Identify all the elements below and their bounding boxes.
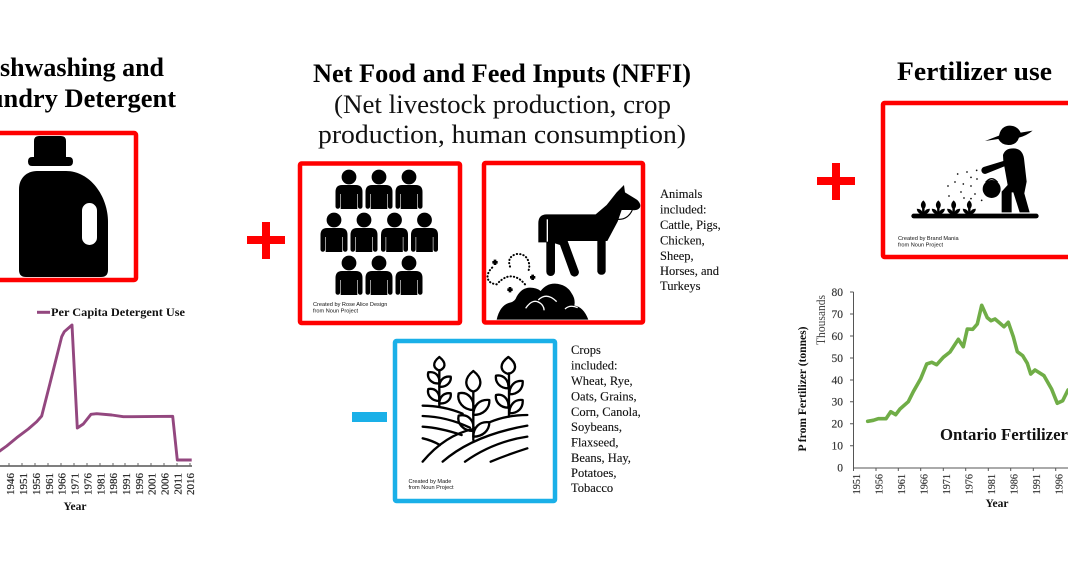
x axis labels: 1976 bbox=[964, 474, 976, 494]
x axis labels: 1981 bbox=[96, 473, 108, 495]
text: crops included: Flaxseed, bbox=[571, 436, 619, 450]
text: crops included: Beans, Hay, bbox=[571, 451, 631, 465]
x axis labels: 1971 bbox=[942, 474, 953, 494]
x axis title: Year bbox=[64, 501, 86, 513]
x axis labels: 1961 bbox=[897, 474, 908, 494]
x axis labels: 1981 bbox=[987, 474, 998, 494]
y axis labels bbox=[832, 287, 843, 474]
x axis labels: 2016 bbox=[185, 472, 197, 495]
y axis title: P from fertilizer: P from Fertilizer (tonnes) bbox=[795, 326, 809, 452]
x axis labels bbox=[852, 474, 1066, 494]
text: crops included: Soybeans, bbox=[571, 420, 622, 434]
line: fertilizer P bbox=[868, 305, 1068, 421]
y axis labels: 80 bbox=[832, 287, 843, 299]
plus sign: detergent to NFFI bbox=[247, 222, 285, 259]
text: crops included: included: bbox=[571, 358, 618, 372]
x axis labels: 1976 bbox=[82, 472, 94, 495]
x axis labels: 1956 bbox=[31, 472, 43, 495]
text: animals included: included: bbox=[660, 202, 707, 216]
x axis labels: 1966 bbox=[920, 474, 930, 494]
legend: Per Capita Detergent Use bbox=[51, 307, 185, 319]
heading: detergent bbox=[0, 53, 176, 113]
icon: people bbox=[300, 164, 460, 323]
x axis labels: 1991 bbox=[1032, 474, 1043, 494]
icon: people: Created by Rose Alice Design bbox=[313, 302, 387, 308]
text: animals included bbox=[660, 187, 721, 293]
x axis labels: 2011 bbox=[172, 473, 184, 495]
x axis labels: 1956 bbox=[874, 474, 886, 494]
x axis labels: 2006 bbox=[160, 472, 172, 495]
x axis labels: 1946 bbox=[5, 472, 17, 495]
y axis labels: 0 bbox=[837, 462, 843, 474]
text: crops included: Corn, Canola, bbox=[571, 405, 641, 419]
text: animals included: Horses, and bbox=[660, 264, 720, 278]
icon: detergent bottle bbox=[0, 133, 136, 280]
x axis labels: 2001 bbox=[146, 473, 158, 495]
x axis labels: 1986 bbox=[108, 472, 120, 495]
text: crops included: Wheat, Rye, bbox=[571, 374, 633, 388]
icon: crops bbox=[395, 341, 555, 501]
y axis labels: 30 bbox=[832, 397, 843, 409]
y axis labels: 40 bbox=[832, 375, 843, 387]
y axis labels: 20 bbox=[832, 419, 843, 431]
heading: NFFI bbox=[313, 59, 691, 149]
text: animals included: Cattle, Pigs, bbox=[660, 218, 721, 232]
x axis labels: 1991 bbox=[121, 473, 133, 495]
x axis labels bbox=[0, 472, 197, 495]
text: animals included: Animals bbox=[660, 187, 702, 201]
x axis labels: 1996 bbox=[134, 472, 146, 495]
text: crops included: Tobacco bbox=[571, 481, 613, 495]
x axis labels: 1966 bbox=[56, 472, 68, 495]
y axis labels: 60 bbox=[832, 331, 843, 343]
line: detergent use bbox=[0, 325, 192, 460]
heading: NFFI: production, human consumption) bbox=[318, 120, 686, 149]
icon: people: from Noun Project bbox=[313, 308, 359, 314]
x axis labels: 1996 bbox=[1054, 474, 1066, 494]
y axis labels: 10 bbox=[832, 441, 843, 453]
x axis labels: 1951 bbox=[852, 474, 863, 494]
chart: per capita detergent use bbox=[0, 307, 197, 513]
x axis title: Year bbox=[986, 498, 1008, 510]
text: animals included: Chicken, bbox=[660, 234, 705, 248]
x axis labels: 1951 bbox=[18, 473, 30, 495]
icon: farmer spreading fertilizer: from Noun Project bbox=[898, 242, 944, 248]
plus sign: NFFI to fertilizer bbox=[817, 163, 855, 200]
icon: crops: from Noun Project bbox=[408, 485, 454, 491]
x axis labels: 1986 bbox=[1010, 474, 1020, 494]
chart: Ontario fertilizer bbox=[795, 287, 1068, 510]
text: crops included: Oats, Grains, bbox=[571, 390, 637, 404]
icon: farmer spreading fertilizer bbox=[883, 103, 1068, 257]
x axis labels: 1971 bbox=[70, 473, 82, 495]
text: crops included: Potatoes, bbox=[571, 466, 616, 480]
icon: horse and manure bbox=[484, 163, 643, 322]
heading: NFFI: Net Food and Feed Inputs (NFFI) bbox=[313, 59, 691, 88]
y axis labels: 70 bbox=[832, 309, 843, 321]
icon: crops: Created by Made bbox=[408, 479, 451, 485]
x axis labels: 1961 bbox=[44, 473, 56, 495]
panel: detergent bbox=[0, 53, 197, 513]
text: crops included: Crops bbox=[571, 343, 601, 357]
chart label: Ontario Fertilizer bbox=[940, 425, 1068, 444]
heading: NFFI: (Net livestock production, crop bbox=[334, 90, 671, 119]
text: animals included: Turkeys bbox=[660, 279, 701, 293]
y axis labels: 50 bbox=[832, 353, 843, 365]
text: animals included: Sheep, bbox=[660, 249, 694, 263]
y axis title: thousands: Thousands bbox=[813, 295, 828, 345]
heading: fertilizer use: Fertilizer use bbox=[897, 57, 1052, 86]
minus sign: crops bbox=[352, 412, 387, 422]
icon: farmer spreading fertilizer: Created by Brand Mania bbox=[898, 236, 960, 242]
text: crops included bbox=[571, 343, 641, 495]
